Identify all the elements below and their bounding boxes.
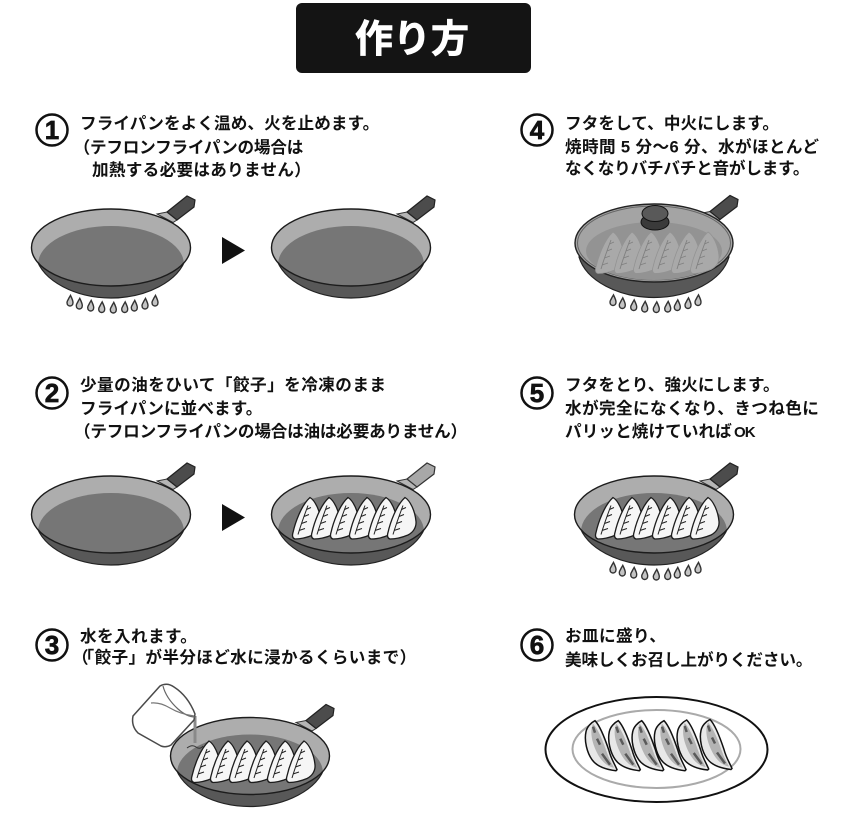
step 2 text: （テフロンフライパンの場合は油は必要ありません） [74, 422, 467, 441]
panel: step 2 [32, 374, 467, 570]
step 6 text: 美味しくお召し上がりください。 [565, 650, 812, 670]
step 5 text: 水が完全になくなり、きつね色に [565, 398, 819, 418]
pan on burner [32, 196, 195, 313]
step 5 text: フタをとり、強火にします。 [565, 376, 780, 394]
step 1 text [74, 114, 379, 180]
step 3 text: （「餃子」が半分ほど水に浸かるくらいまで） [72, 647, 417, 667]
step number 6 [522, 630, 552, 660]
panel: step 1 [32, 114, 435, 313]
step 3 text: 水を入れます。 [80, 627, 197, 646]
step number 3 [36, 630, 68, 660]
title [296, 3, 531, 73]
step 1 text: （テフロンフライパンの場合は [74, 138, 304, 157]
step number 6: 6 [530, 630, 544, 660]
step number 2 [36, 378, 68, 408]
pan with gyoza and water [170, 704, 334, 812]
step 2 text: フライパンに並べます。 [80, 399, 262, 418]
title: 作り方 [355, 19, 469, 61]
step 4 text: 焼時間 5 分～6 分、水がほとんど [565, 136, 819, 156]
panel: step 4 [522, 114, 819, 312]
pan off heat [272, 196, 435, 303]
oiled pan [32, 463, 195, 570]
panel: step 5 [522, 376, 819, 580]
covered pan on burner [575, 196, 738, 312]
panel: step 6 [522, 626, 812, 802]
step 1 text: フライパンをよく温め、火を止めます。 [80, 114, 379, 133]
step 3 text [72, 627, 417, 667]
step 5 text [565, 376, 819, 441]
arrow [222, 504, 245, 531]
plate with gyoza [546, 697, 768, 802]
step 4 text [565, 114, 819, 178]
step number 5 [522, 378, 552, 408]
step 2 text: 少量の油をひいて「餃子」を冷凍のまま [80, 374, 386, 394]
step 2 text [74, 374, 467, 441]
step number 5: 5 [530, 378, 544, 408]
step number 4 [522, 114, 552, 146]
step number 4: 4 [530, 115, 545, 145]
step 1 text: 加熱する必要はありません） [92, 160, 311, 180]
step number 2: 2 [45, 378, 59, 408]
step number 3: 3 [45, 630, 59, 660]
step 6 text [565, 626, 812, 670]
panel: step 3 [36, 627, 417, 812]
pan with gyoza on burner [574, 463, 738, 580]
step 4 text: フタをして、中火にします。 [565, 114, 779, 133]
arrow [222, 237, 245, 264]
step 6 text: お皿に盛り、 [565, 626, 666, 646]
step number 1: 1 [45, 115, 59, 145]
pan with gyoza [272, 463, 435, 570]
step number 1 [36, 114, 68, 146]
step 4 text: なくなりバチバチと音がします。 [565, 158, 809, 178]
measuring cup pouring water [133, 684, 203, 748]
step 5 text: パリッと焼けていればOK [565, 421, 756, 441]
